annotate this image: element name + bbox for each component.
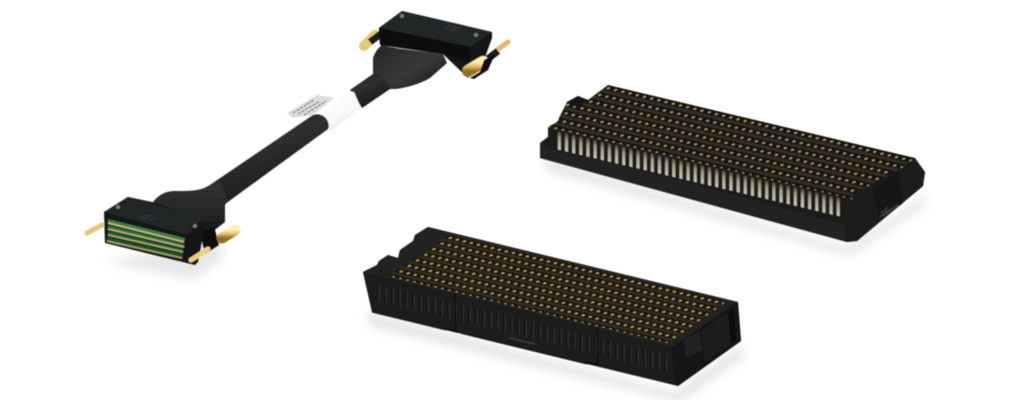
top thumbscrew	[468, 54, 495, 79]
cable assembly	[87, 11, 508, 265]
top connector pins	[364, 33, 508, 61]
right end tower with logo	[853, 169, 903, 225]
shadows beneath products	[105, 158, 925, 400]
front slits	[378, 284, 668, 372]
row of exposed contacts	[556, 129, 843, 217]
top connector overmold boot	[373, 45, 447, 89]
right end tower with logo: TE	[880, 205, 891, 220]
contact side wall	[548, 127, 856, 222]
embossed TE logo: TE	[438, 23, 466, 33]
contact field	[388, 234, 727, 343]
embossed TE logo: TE	[135, 213, 163, 223]
upper right board connector	[540, 85, 925, 242]
lower thin gold pin	[191, 249, 208, 260]
lower braided cable	[207, 114, 329, 204]
flange right top	[845, 172, 925, 242]
top rim	[363, 227, 738, 347]
front face	[363, 272, 675, 385]
upper braided sleeve	[350, 73, 390, 108]
right end wall	[672, 302, 741, 386]
lower board connector	[363, 227, 741, 386]
bottom connector overmold boot	[153, 182, 228, 236]
front face seams and marking	[372, 293, 598, 366]
top connector housing	[379, 11, 492, 78]
housing back fill	[363, 227, 741, 386]
left end tab	[567, 96, 588, 108]
green contact stack	[107, 218, 185, 260]
top contact field	[548, 85, 915, 200]
flange base	[540, 90, 925, 242]
bottom connector housing	[104, 197, 205, 265]
white cable label band	[320, 91, 361, 131]
printed cable tag	[287, 95, 334, 118]
bottom connector bracket and thumbscrew	[87, 225, 235, 254]
flange front face	[540, 143, 847, 242]
